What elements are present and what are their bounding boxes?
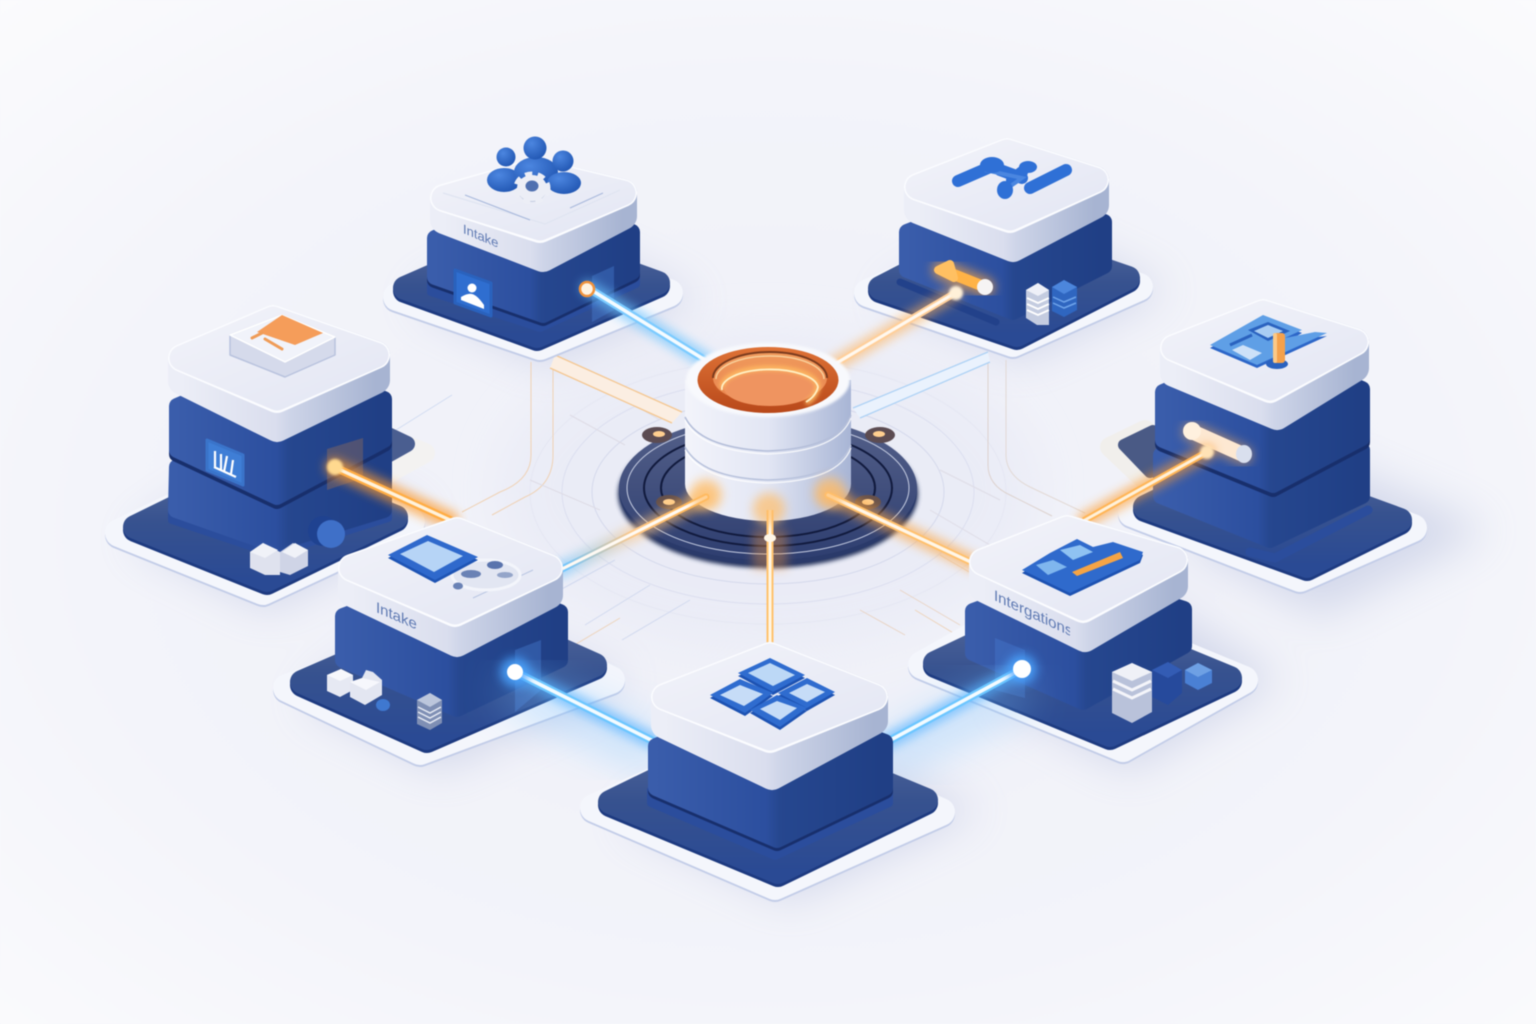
central hub cylinder bbox=[685, 343, 851, 521]
beam: right module to integrations bbox=[1085, 445, 1214, 520]
module: left double stack bbox=[119, 315, 425, 593]
beam: top right module to hub bbox=[835, 286, 963, 364]
label: Intake: Intake bbox=[376, 600, 417, 633]
translucent emitter panel bbox=[995, 638, 1025, 698]
beam: left module to intake bbox=[327, 438, 450, 520]
module: bottom bbox=[594, 656, 941, 888]
module: right double stack bbox=[1110, 313, 1413, 580]
badge: side tile bbox=[207, 440, 243, 485]
pale orange trace band bbox=[550, 355, 682, 423]
beam: hub to bottom module bbox=[753, 493, 787, 645]
beam: lower left module to bottom module bbox=[500, 657, 655, 750]
icon: white blocks bbox=[250, 543, 308, 575]
module: lower left Intake bbox=[287, 531, 611, 753]
floor circuit traces bbox=[396, 360, 1085, 650]
label: Intake: Intake bbox=[463, 221, 498, 251]
soft floor shadows bbox=[130, 220, 1490, 900]
hub orange well bbox=[698, 347, 838, 413]
icon: four tile grid bbox=[710, 658, 835, 730]
beam: top left module to hub bbox=[580, 282, 705, 360]
icon: team with gear bbox=[487, 136, 581, 202]
icon: orange card on box bbox=[230, 315, 335, 377]
glowing connector: arrow tube bbox=[938, 264, 993, 295]
icon: screen and gears bbox=[388, 535, 520, 590]
icon: blue network bbox=[958, 157, 1066, 199]
beam: integrations module to bottom module bbox=[885, 654, 1037, 755]
icon: knob bbox=[308, 516, 345, 548]
icon: server stacks bbox=[1026, 280, 1077, 325]
glowing connector: tube bbox=[1183, 422, 1252, 463]
icon: dashboard panel bbox=[1022, 539, 1143, 596]
module: top right bbox=[868, 152, 1139, 345]
disc status lights bbox=[642, 427, 895, 509]
pale blue trace band bbox=[853, 352, 990, 418]
icon: blue panel with orange pin bbox=[1210, 315, 1327, 369]
module: lower right Integrations bbox=[922, 529, 1244, 750]
beam: hub to integrations module bbox=[814, 477, 975, 564]
floor tint around hub bbox=[498, 330, 1038, 650]
top rim lines bbox=[443, 190, 620, 224]
central hub base disc bbox=[618, 416, 918, 568]
isometric hub and modules diagram bbox=[104, 136, 1480, 913]
beam: hub to lower left module bbox=[560, 479, 722, 570]
translucent emitter panel bbox=[515, 640, 541, 712]
badge: person tile bbox=[455, 270, 491, 316]
translucent emitter panel bbox=[592, 266, 614, 322]
label: Intergations: Intergations bbox=[994, 588, 1072, 641]
icon: small equipment bbox=[327, 669, 442, 730]
icon: server blocks bbox=[1112, 662, 1212, 723]
module: top left bbox=[397, 136, 669, 348]
